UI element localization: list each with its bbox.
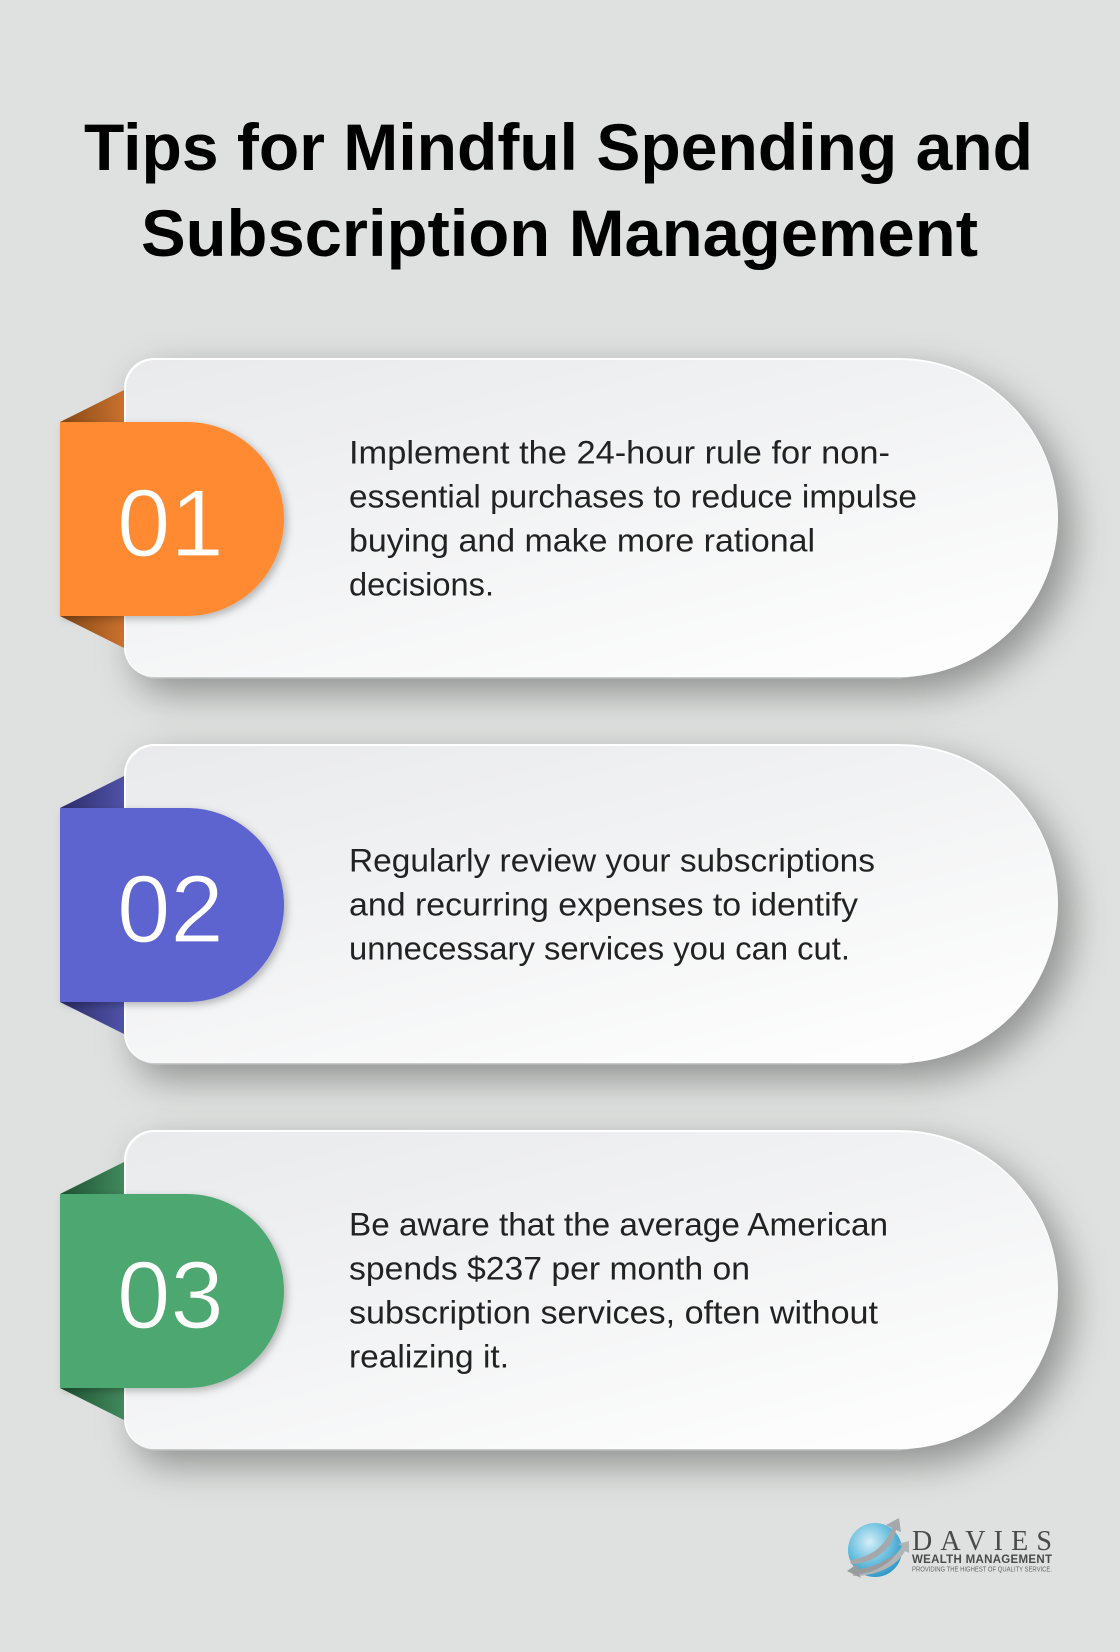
number badge 01: 01 — [117, 470, 224, 577]
icon: globe with arrows — [847, 1518, 909, 1578]
ribbon fold: blue — [60, 776, 124, 1034]
number badge 02: 02 — [117, 856, 224, 963]
tip text 01: decisions. — [349, 566, 494, 602]
ribbon fold: green — [60, 1162, 124, 1420]
tip text 03: realizing it. — [349, 1338, 509, 1374]
tip text 01: buying and make more rational — [349, 522, 815, 558]
number badge 03: 03 — [117, 1242, 224, 1349]
title: Subscription Management — [141, 196, 978, 270]
panel: tip 01 — [60, 358, 1071, 692]
logo: Davies Wealth Management — [847, 1518, 1052, 1578]
tip text 03 — [349, 1206, 888, 1374]
card body — [124, 744, 1058, 1064]
logo wordmark: PROVIDING THE HIGHEST OF QUALITY SERVICE. — [912, 1564, 1052, 1574]
number badge 02 — [60, 808, 284, 1002]
tip text 01: Implement the 24-hour rule for non- — [349, 434, 890, 470]
title — [84, 110, 1033, 270]
number badge 03 — [60, 1194, 284, 1388]
panel: tip 02 — [60, 744, 1071, 1078]
tip text 03: subscription services, often without — [349, 1294, 878, 1330]
tip text 02: Regularly review your subscriptions — [349, 842, 875, 878]
ribbon fold: orange — [60, 390, 124, 648]
tip text 03: Be aware that the average American — [349, 1206, 888, 1242]
number badge 01 — [60, 422, 284, 616]
card body — [124, 358, 1058, 678]
tip text 02: and recurring expenses to identify — [349, 886, 858, 922]
logo wordmark: DAVIES — [912, 1526, 1052, 1557]
tip text 01: essential purchases to reduce impulse — [349, 478, 917, 514]
tip text 02: unnecessary services you can cut. — [349, 930, 850, 966]
card body — [124, 1130, 1058, 1450]
logo wordmark: WEALTH MANAGEMENT — [912, 1554, 1052, 1566]
tip text 01 — [349, 434, 917, 602]
logo wordmark — [912, 1526, 1052, 1574]
tip text 02 — [349, 842, 875, 966]
title: Tips for Mindful Spending and — [84, 110, 1033, 184]
tip text 03: spends $237 per month on — [349, 1250, 750, 1286]
panel: tip 03 — [60, 1130, 1071, 1464]
